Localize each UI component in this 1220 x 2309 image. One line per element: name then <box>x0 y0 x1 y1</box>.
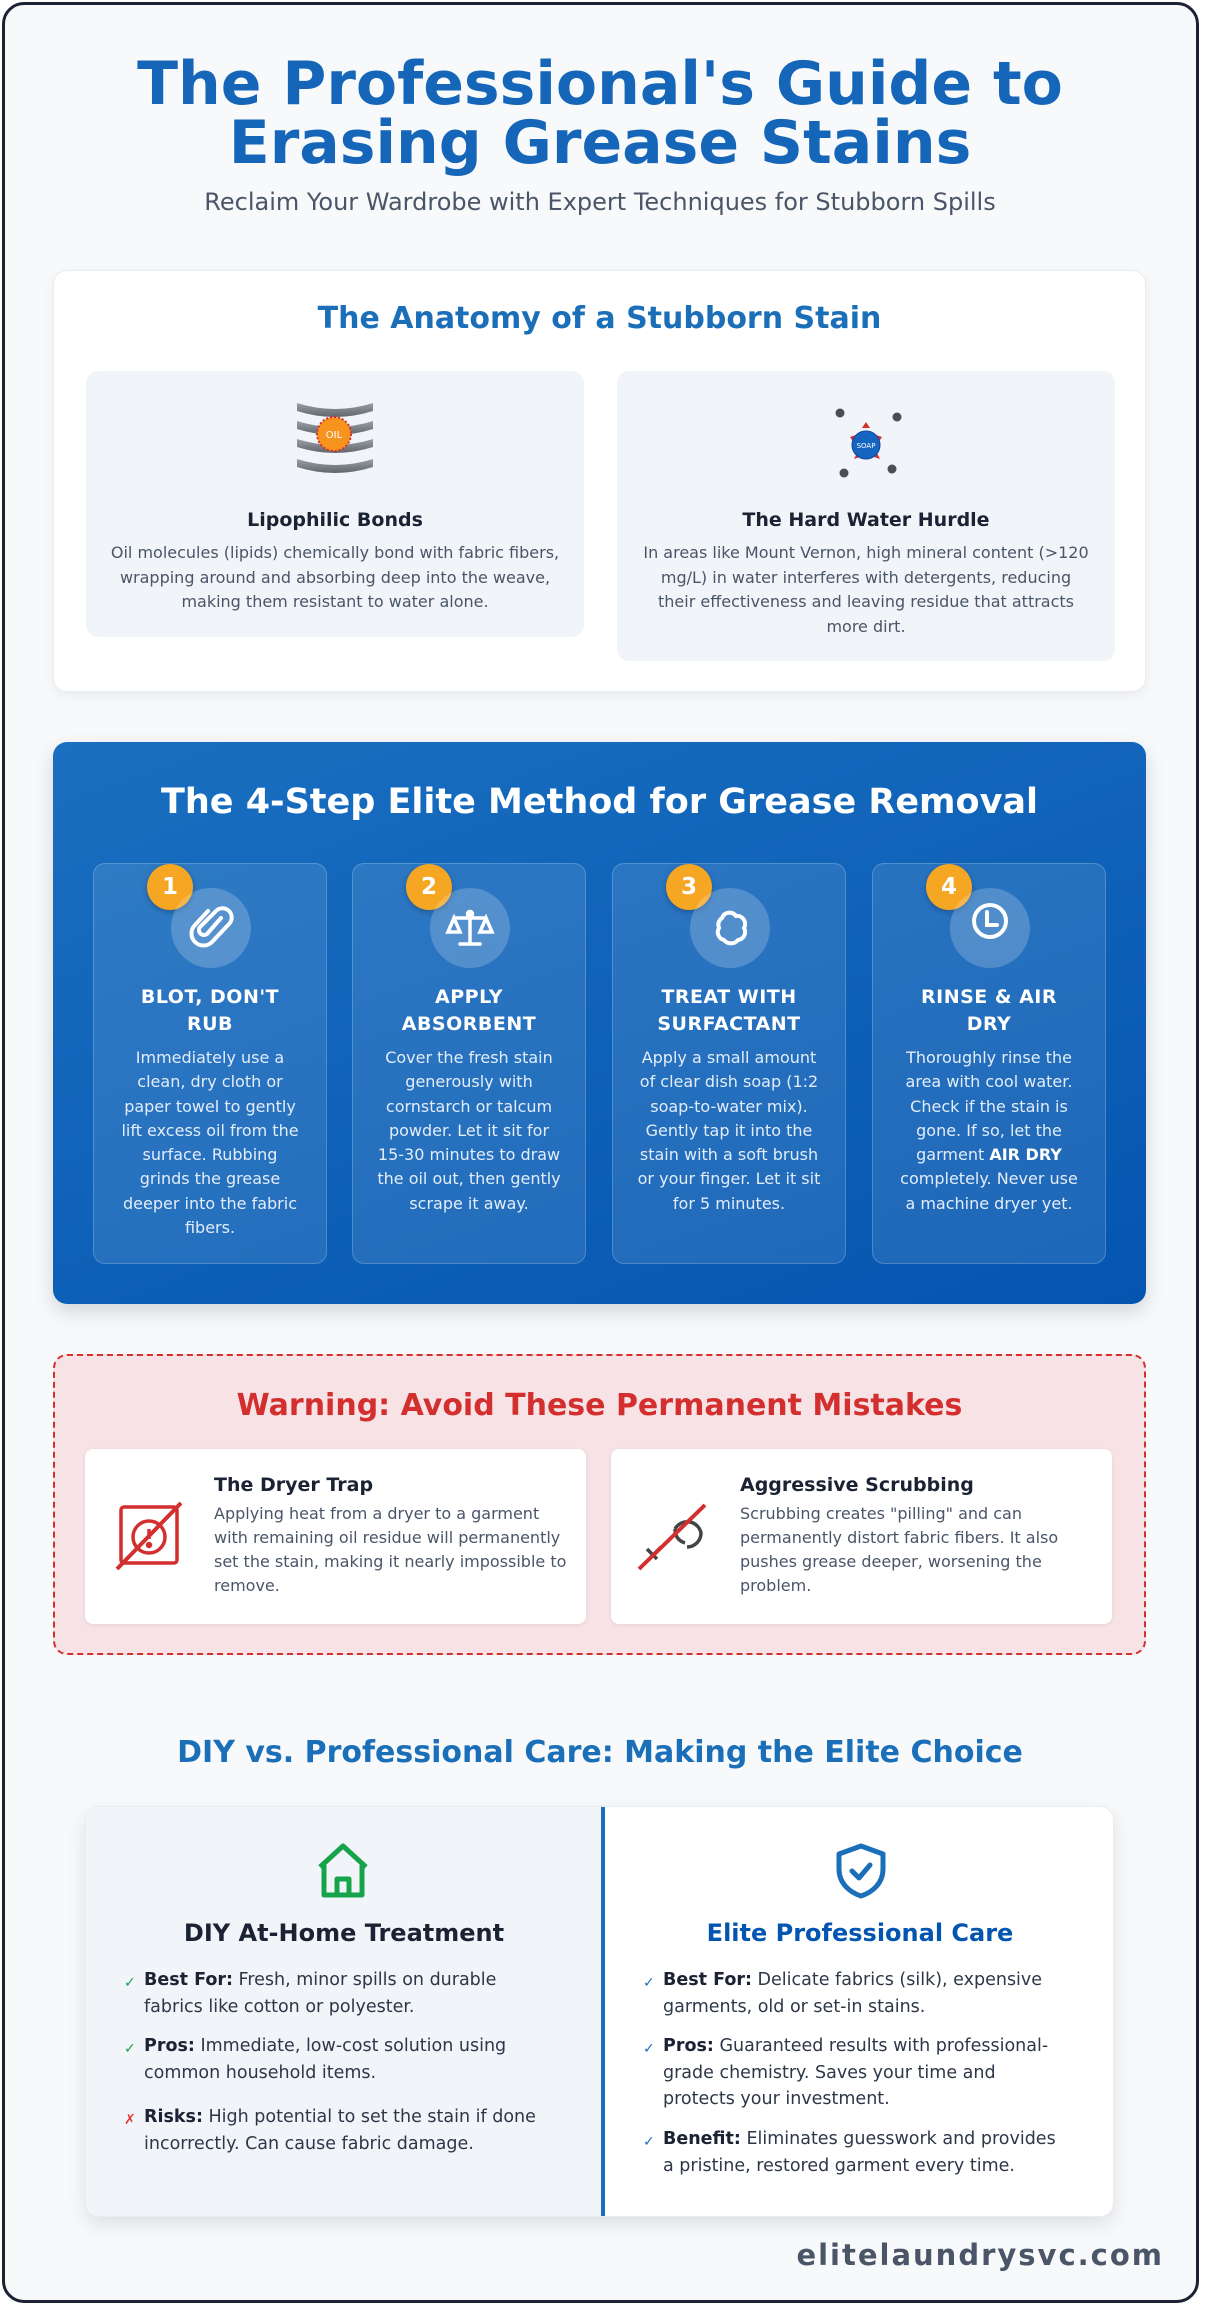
badge 1 <box>147 864 193 910</box>
badge 4 <box>926 864 972 910</box>
list: DIY points: Pros: Immediate, low-cost solution using common household items. <box>144 2036 506 2082</box>
step 4 <box>872 863 1106 1264</box>
panel: anatomy <box>53 270 1146 692</box>
column: professional: ✓ <box>643 1975 655 1991</box>
step 1: Immediately use a clean, dry cloth or paper towel to gently lift excess oil from the surface. Rubbing grinds the grease deeper into the fabric fibers. <box>121 1048 299 1237</box>
step 2: ABSORBENT <box>402 1013 536 1035</box>
step 2: Cover the fresh stain generously with cornstarch or talcum powder. Let it sit for 15-30 minutes to draw the oil out, then gently scrape it away. <box>377 1048 561 1213</box>
step 4: Thoroughly rinse the area with cool water. Check if the stain is gone. If so, let the garment AIR DRY completely. Never use a machine dryer yet. <box>900 1048 1078 1213</box>
icon: scale <box>430 888 510 968</box>
column: DIY: ✓ <box>124 2041 136 2057</box>
title: Erasing Grease Stains <box>229 108 971 178</box>
list: professional points: Pros: Guaranteed results with professional-grade chemistry. Saves your time and protects your investment. <box>663 2036 1048 2109</box>
step 2: APPLY <box>435 986 503 1008</box>
title: DIY: DIY At-Home Treatment <box>184 1919 504 1947</box>
card: hard water <box>617 371 1115 661</box>
heading: warning: Warning: Avoid These Permanent Mistakes <box>237 1388 962 1423</box>
card: hard water: In areas like Mount Vernon, high mineral content (>120 mg/L) in water interferes with detergents, reducing their effectiveness and leaving residue that attracts more dirt. <box>643 543 1089 636</box>
card: hard water: The Hard Water Hurdle <box>742 509 990 531</box>
card: lipophilic bonds: Oil molecules (lipids) chemically bond with fabric fibers, wrapping around and absorbing deep into the weave, making them resistant to water alone. <box>111 543 559 611</box>
icon: soap and minerals <box>836 408 902 478</box>
column: DIY: ✗ <box>124 2112 136 2128</box>
step 4: DRY <box>967 1013 1011 1035</box>
title: professional: Elite Professional Care <box>707 1919 1013 1947</box>
step 1 <box>93 863 327 1264</box>
list: professional points: Best For: Delicate fabrics (silk), expensive garments, old or set-in stains. <box>663 1970 1042 2016</box>
column: DIY <box>86 1807 602 2218</box>
card: dryer trap: The Dryer Trap <box>214 1474 373 1496</box>
step 4: RINSE & AIR <box>921 986 1057 1008</box>
step 3: TREAT WITH <box>661 986 797 1008</box>
card: dryer trap: Applying heat from a dryer to a garment with remaining oil residue will permanently set the stain, making it nearly impossible to remove. <box>214 1504 566 1595</box>
icon: bubbles <box>690 888 770 968</box>
step 3 <box>612 863 846 1264</box>
icon: no scrubbing <box>638 1504 706 1570</box>
list: DIY points: Risks: High potential to set the stain if done incorrectly. Can cause fabric damage. <box>144 2107 536 2154</box>
badge 2: 2 <box>421 874 437 900</box>
badge 3 <box>666 864 712 910</box>
step 1: BLOT, DON'T <box>141 986 279 1008</box>
heading: anatomy: The Anatomy of a Stubborn Stain <box>318 301 881 336</box>
icon: oil in fibers: OIL <box>326 430 343 441</box>
card: lipophilic bonds <box>86 371 584 637</box>
step 3: SURFACTANT <box>657 1013 801 1035</box>
column: professional: ✓ <box>643 2041 655 2057</box>
card: aggressive scrubbing: Aggressive Scrubbing <box>740 1474 974 1496</box>
badge 1: 1 <box>162 874 178 900</box>
heading: 4-step: The 4-Step Elite Method for Grease Removal <box>161 782 1038 822</box>
list: professional points: Benefit: Eliminates guesswork and provides a pristine, restored garment every time. <box>663 2129 1056 2176</box>
heading: DIY vs professional: DIY vs. Professional Care: Making the Elite Choice <box>177 1735 1023 1770</box>
icon: clock <box>950 888 1030 968</box>
panel: 4-step method <box>53 742 1146 1304</box>
step 2 <box>352 863 586 1264</box>
column: professional: ✓ <box>643 2134 655 2150</box>
list: professional points <box>643 1970 1056 2176</box>
list: DIY points: Best For: Fresh, minor spills on durable fabrics like cotton or polyester. <box>144 1970 496 2016</box>
column: DIY: ✓ <box>124 1975 136 1991</box>
title: The Professional's Guide to <box>137 49 1063 119</box>
card: lipophilic bonds: Lipophilic Bonds <box>247 509 423 531</box>
icon: house <box>318 1843 368 1898</box>
icon: shield <box>836 1844 886 1898</box>
icon: paperclip <box>171 888 251 968</box>
panel: warning <box>53 1354 1146 1655</box>
card: aggressive scrubbing <box>611 1449 1112 1624</box>
step 1: RUB <box>187 1013 233 1035</box>
title <box>137 49 1063 178</box>
card: dryer trap <box>85 1449 586 1624</box>
badge 3: 3 <box>681 874 697 900</box>
card: aggressive scrubbing: Scrubbing creates "pilling" and can permanently distort fabric fibers. It also pushes grease deeper, worsening the problem. <box>740 1504 1058 1595</box>
badge 2 <box>406 864 452 910</box>
subtitle: Reclaim Your Wardrobe with Expert Techniques for Stubborn Spills <box>204 188 996 216</box>
panel: comparison <box>85 1806 1114 2217</box>
footer: website: elitelaundrysvc.com <box>796 2238 1164 2272</box>
step 3: Apply a small amount of clear dish soap (1:2 soap-to-water mix). Gently tap it into the stain with a soft brush or your finger. Let it sit for 5 minutes. <box>638 1048 820 1213</box>
badge 4: 4 <box>941 874 957 900</box>
icon: oil in fibers <box>297 403 373 473</box>
column: professional <box>643 1844 1056 2176</box>
icon: no dryer <box>116 1502 182 1570</box>
icon: soap and minerals: SOAP <box>857 442 875 450</box>
list: DIY points <box>124 1970 536 2154</box>
